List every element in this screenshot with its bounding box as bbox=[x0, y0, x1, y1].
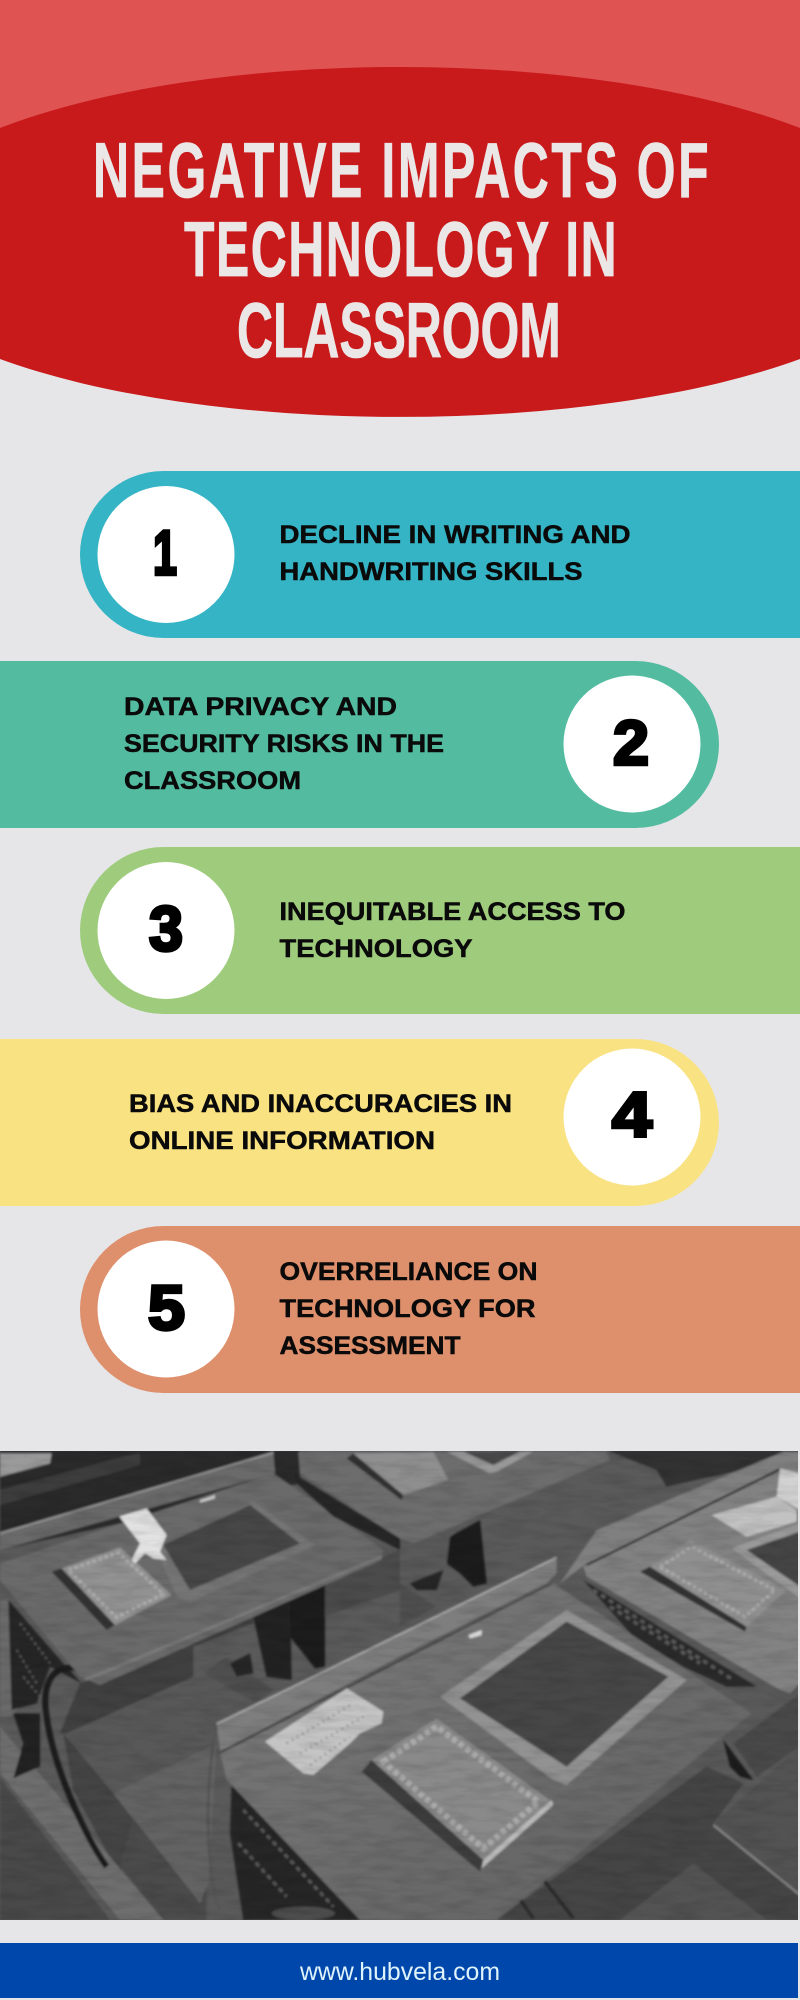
item 2 text: DATA PRIVACY AND bbox=[124, 693, 397, 721]
item 5 number badge: 5 bbox=[148, 1274, 185, 1344]
item 1 text bbox=[280, 521, 630, 586]
desk C book bbox=[362, 1760, 483, 1872]
under desk A bbox=[60, 1617, 254, 1734]
title bbox=[93, 127, 709, 374]
photo: old classroom desks bbox=[0, 1450, 800, 1920]
item 1 panel bbox=[80, 471, 800, 638]
desk C slate bbox=[440, 1610, 687, 1785]
top right dark corner bbox=[607, 1450, 800, 1487]
item 2 number badge bbox=[564, 676, 700, 812]
item 5 text: TECHNOLOGY FOR bbox=[280, 1295, 536, 1323]
item 4 panel bbox=[0, 1039, 719, 1206]
item 5 text: OVERRELIANCE ON bbox=[280, 1258, 538, 1286]
back left dark area bbox=[0, 1450, 300, 1550]
item 1 text: DECLINE IN WRITING AND bbox=[280, 521, 630, 549]
desk C rail bbox=[217, 1557, 557, 1752]
item 2 panel bbox=[0, 661, 719, 828]
desk B bbox=[293, 1473, 400, 1550]
item 3 text: INEQUITABLE ACCESS TO bbox=[280, 898, 626, 926]
header red ellipse bbox=[0, 67, 800, 417]
desk C cloth bbox=[265, 1688, 383, 1775]
item 4 pill bbox=[0, 1039, 719, 1206]
item 2 text bbox=[124, 693, 444, 795]
item 5 text: ASSESSMENT bbox=[280, 1332, 460, 1360]
item 2 pill bbox=[0, 661, 719, 828]
footer bar bbox=[0, 1943, 798, 1998]
item 4 text bbox=[129, 1090, 512, 1155]
item 2 text: CLASSROOM bbox=[124, 767, 301, 795]
item 1 number badge bbox=[98, 486, 234, 623]
title: TECHNOLOGY IN bbox=[184, 206, 617, 293]
item 2 text: SECURITY RISKS IN THE bbox=[124, 730, 444, 758]
item 4 number badge bbox=[564, 1048, 700, 1186]
item 3 panel bbox=[80, 847, 800, 1014]
desk A rail bbox=[0, 1452, 275, 1550]
desk C legs bbox=[230, 1780, 360, 1920]
desk A top bbox=[0, 1473, 383, 1685]
item 2 number badge: 2 bbox=[613, 708, 649, 778]
item 1 text: HANDWRITING SKILLS bbox=[280, 558, 582, 586]
item 1 pill bbox=[80, 471, 800, 638]
item 3 number badge bbox=[98, 862, 234, 999]
floor left bbox=[0, 1600, 30, 1717]
item 4 text: BIAS AND INACCURACIES IN bbox=[129, 1090, 512, 1118]
footer website text: www.hubvela.com bbox=[299, 1958, 500, 1986]
item 4 text: ONLINE INFORMATION bbox=[129, 1127, 435, 1155]
item 3 text: TECHNOLOGY bbox=[280, 935, 473, 963]
item 5 number badge bbox=[98, 1240, 234, 1378]
title: NEGATIVE IMPACTS OF bbox=[93, 127, 709, 214]
item 5 panel bbox=[80, 1226, 800, 1393]
item 3 number badge: 3 bbox=[149, 894, 183, 964]
desk C top bbox=[220, 1583, 752, 1920]
desk A slate bbox=[157, 1502, 315, 1603]
item 3 text bbox=[280, 898, 626, 963]
item 3 pill bbox=[80, 847, 800, 1014]
item 5 text bbox=[280, 1258, 538, 1360]
title: CLASSROOM bbox=[237, 287, 561, 374]
desk A tissue bbox=[119, 1508, 167, 1563]
wood grain texture bbox=[0, 1451, 798, 1920]
item 1 number badge: 1 bbox=[153, 518, 177, 588]
lower right floor and desk E bbox=[497, 1767, 800, 1920]
header background band bbox=[0, 0, 800, 135]
desk A book bbox=[52, 1568, 115, 1630]
desk D bbox=[583, 1580, 757, 1687]
seat bbox=[113, 1743, 217, 1903]
item 5 pill bbox=[80, 1226, 800, 1393]
item 4 number badge: 4 bbox=[612, 1080, 652, 1150]
